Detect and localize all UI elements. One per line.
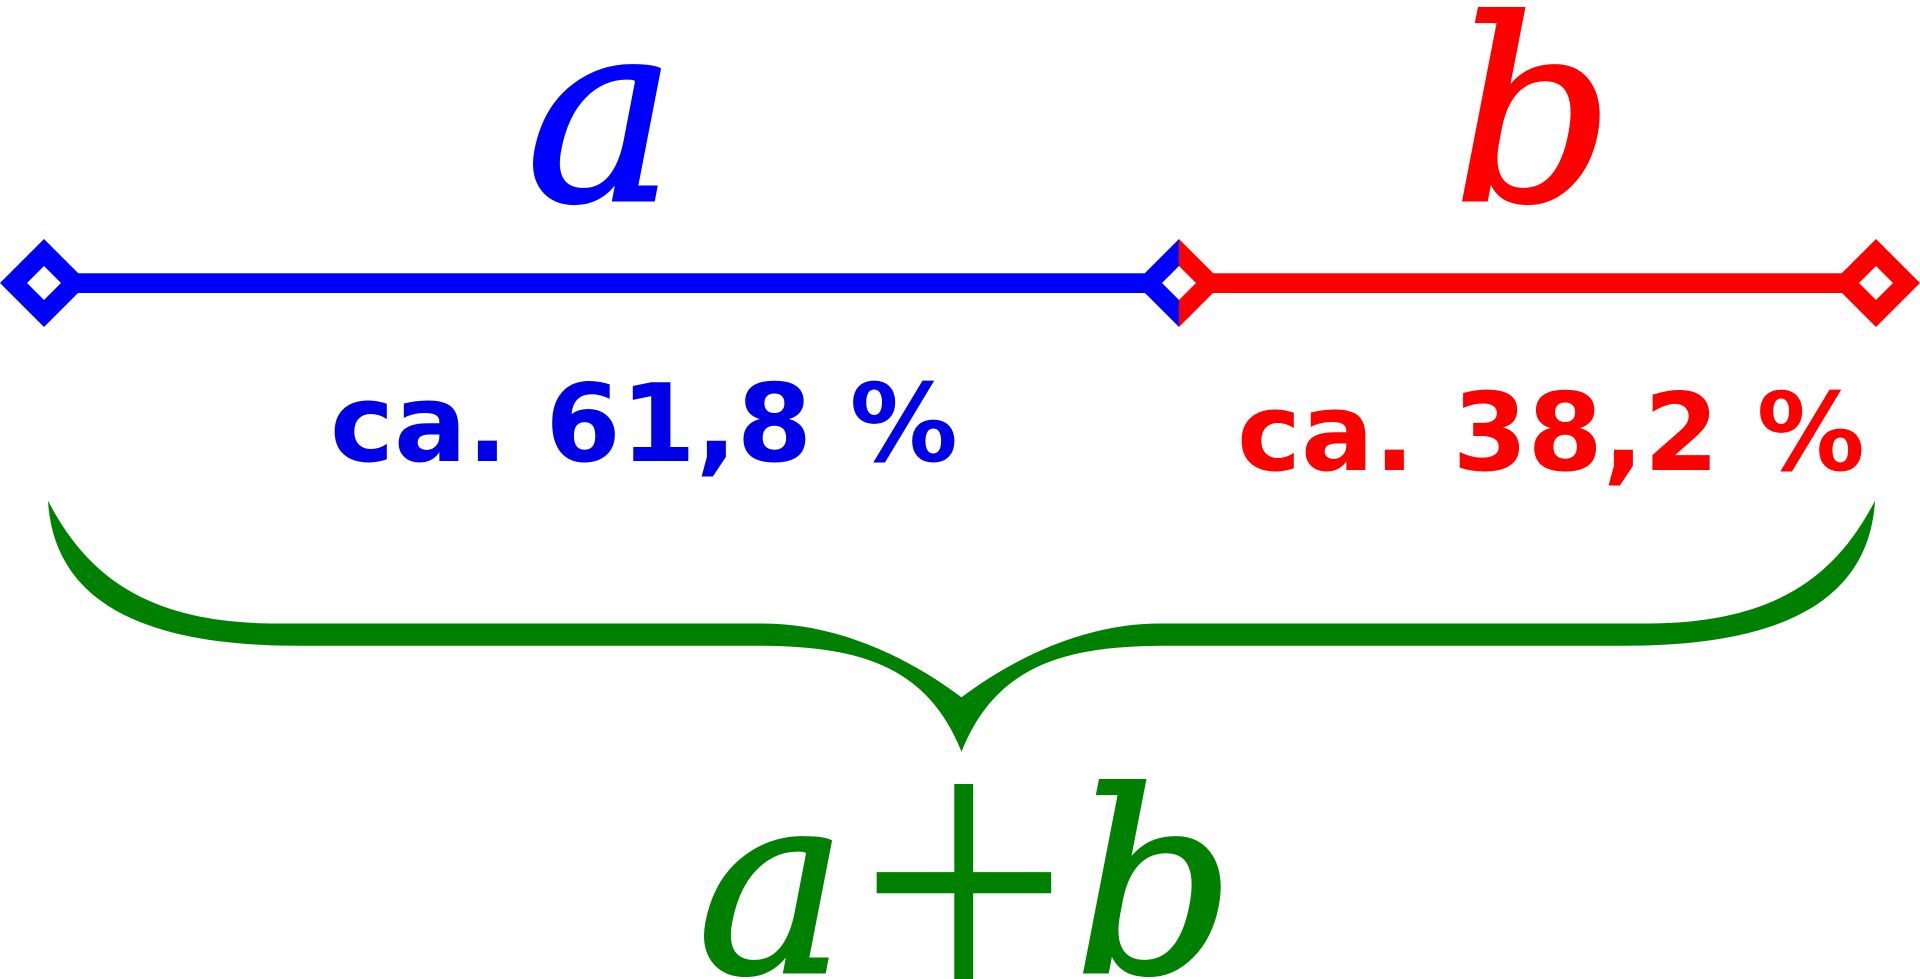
segment b: red line with diamond ends [1179, 239, 1920, 327]
curly brace [48, 501, 1875, 752]
percentage a: ca. 61,8 % [330, 362, 958, 487]
segment a: blue line with diamond ends [0, 239, 1179, 327]
percentage b: ca. 38,2 % [1237, 371, 1865, 496]
sum label: a+b [697, 645, 1235, 979]
